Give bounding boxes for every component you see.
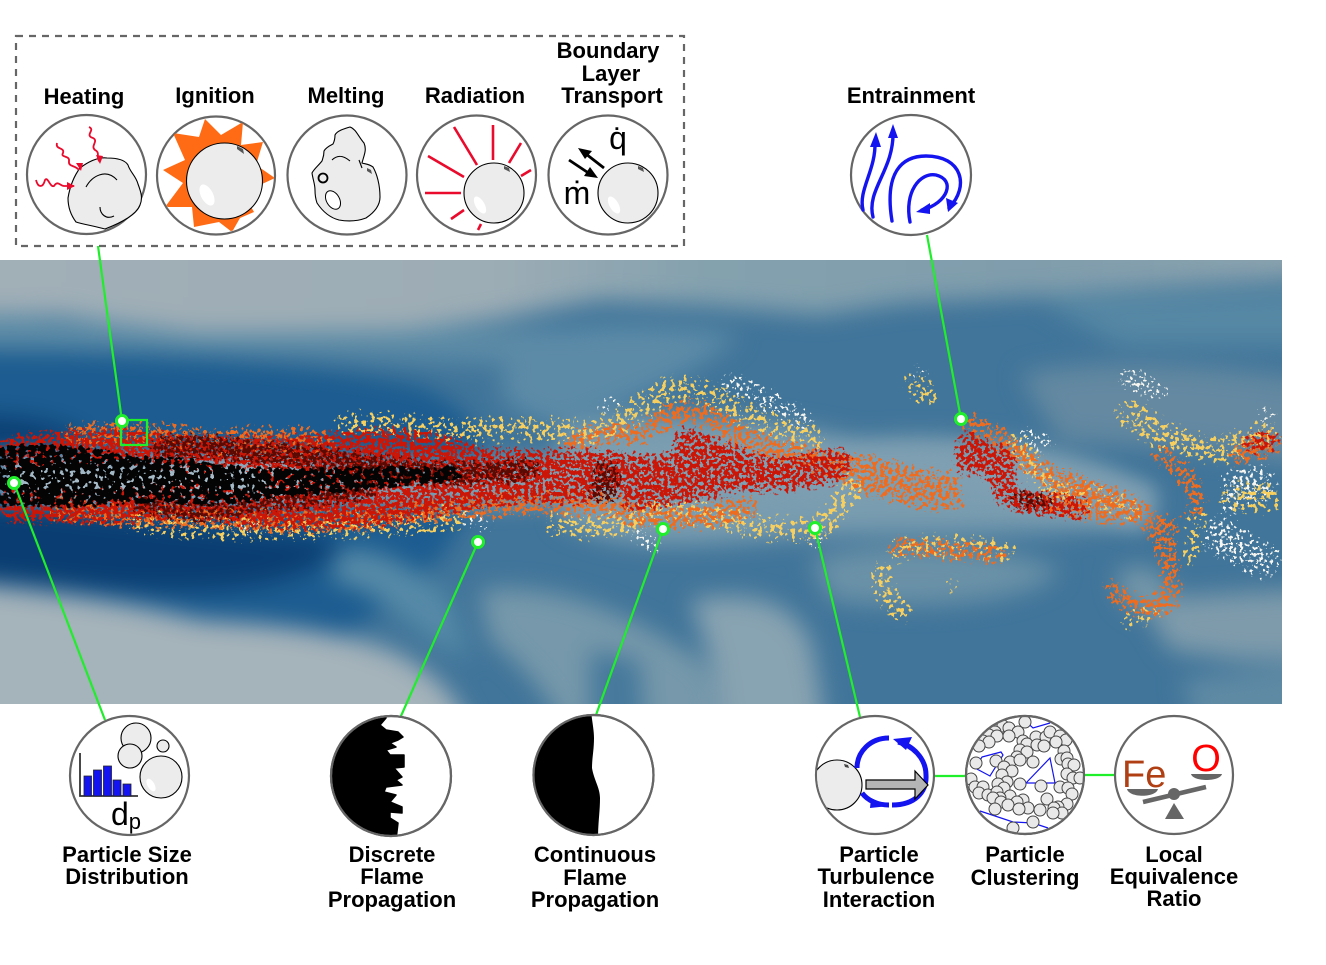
connector lines and markers [8, 235, 1115, 776]
heading: Radiation: Radiation [425, 83, 525, 108]
particle flame cloud [0, 370, 1282, 622]
icon: particle size distribution: d [111, 796, 129, 832]
icon: radiation [417, 116, 536, 234]
icon: entrainment [851, 115, 971, 235]
icon: continuous flame front [532, 714, 655, 836]
panel: particle-scale processes dashed frame [16, 36, 684, 246]
heading: Entrainment: Entrainment [847, 83, 976, 108]
label: Particle Turbulence Interaction: Turbulence [818, 864, 934, 889]
label: Local Equivalence Ratio: Local [1145, 842, 1203, 867]
heading: Boundary Layer Transport: Layer [582, 61, 641, 86]
icon: ignition [157, 116, 275, 234]
label: Discrete Flame Propagation: Discrete [349, 842, 435, 867]
icon: boundary layer transport: ṁ [564, 175, 590, 211]
icon: local equivalence ratio balance [1115, 716, 1233, 834]
label: Particle Size Distribution: Distribution [65, 864, 189, 889]
icon: particle size distribution [70, 716, 189, 835]
heading: Boundary Layer Transport: Boundary [557, 38, 660, 63]
heading: Ignition: Ignition [175, 83, 255, 108]
label: Particle Clustering: Clustering [971, 865, 1079, 890]
label: Continuous Flame Propagation: Continuous [534, 842, 656, 867]
icon: particle clustering [965, 716, 1086, 834]
label: Local Equivalence Ratio: Equivalence [1110, 864, 1238, 889]
icon: boundary layer transport: q̇ [609, 120, 627, 156]
heading: Heating: Heating [44, 84, 124, 109]
label: Continuous Flame Propagation: Propagation [531, 887, 659, 912]
icon: local equivalence ratio balance: O [1191, 738, 1221, 780]
label: Discrete Flame Propagation: Flame [360, 864, 424, 889]
icon: local equivalence ratio balance: Fe [1122, 754, 1166, 796]
heading: Boundary Layer Transport: Transport [561, 83, 663, 108]
label: Particle Turbulence Interaction: Particle [839, 842, 919, 867]
label: Particle Size Distribution: Particle Size [62, 842, 192, 867]
flow field background [0, 260, 1282, 704]
icon: melting [288, 116, 406, 234]
label: Discrete Flame Propagation: Propagation [328, 887, 456, 912]
heading: Melting: Melting [308, 83, 384, 108]
icon: particle size distribution: p [129, 809, 141, 834]
label: Continuous Flame Propagation: Flame [563, 865, 627, 890]
label: Particle Turbulence Interaction: Interaction [823, 887, 935, 912]
label: Local Equivalence Ratio: Ratio [1146, 886, 1202, 911]
label: Particle Clustering: Particle [985, 842, 1065, 867]
icon: discrete flame front [330, 714, 452, 838]
icon: boundary layer transport [548, 116, 668, 234]
icon: heating [27, 115, 146, 234]
icon: particle turbulence interaction [812, 716, 934, 834]
